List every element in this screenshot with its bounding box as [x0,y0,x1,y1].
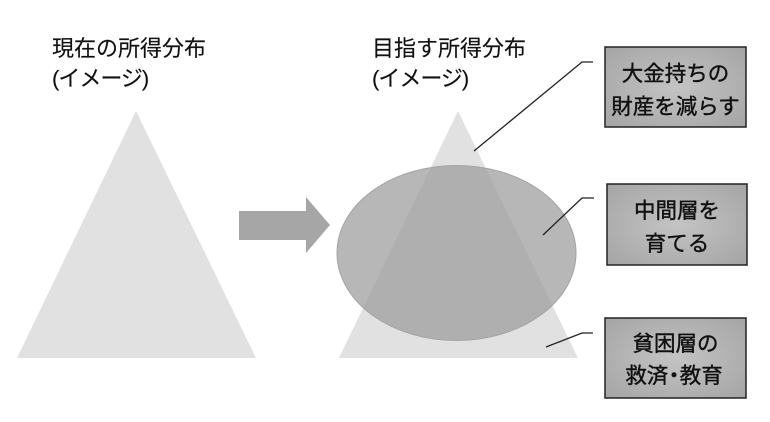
heading: target income distribution: 目指す所得分布 [372,36,526,61]
heading: current income distribution: (イメージ) [52,66,148,91]
box: reduce wealth of the rich [605,47,746,127]
box: grow the middle class: 中間層を [634,199,720,223]
heading: target income distribution [372,36,526,91]
leader line: triangle base to poverty box [546,333,593,347]
triangle: current distribution [17,111,256,358]
leader line: ellipse to middle class box [543,198,594,235]
ellipse: expanded middle class [337,166,576,340]
box: reduce wealth of the rich: 大金持ちの [622,62,729,86]
triangle: target distribution [339,111,578,358]
box: relief and education for the poor: 救済・教育 [625,364,723,388]
box: relief and education for the poor [605,318,746,398]
box: grow the middle class [607,184,747,265]
box: relief and education for the poor: 貧困層の [632,332,719,356]
heading: current income distribution [52,36,206,91]
box: grow the middle class: 育てる [645,232,709,256]
heading: current income distribution: 現在の所得分布 [52,36,206,61]
arrow: current to target [239,197,330,253]
box: reduce wealth of the rich: 財産を減らす [611,95,740,119]
heading: target income distribution: (イメージ) [372,66,468,91]
leader line: top of triangle to wealthy box [474,62,593,151]
